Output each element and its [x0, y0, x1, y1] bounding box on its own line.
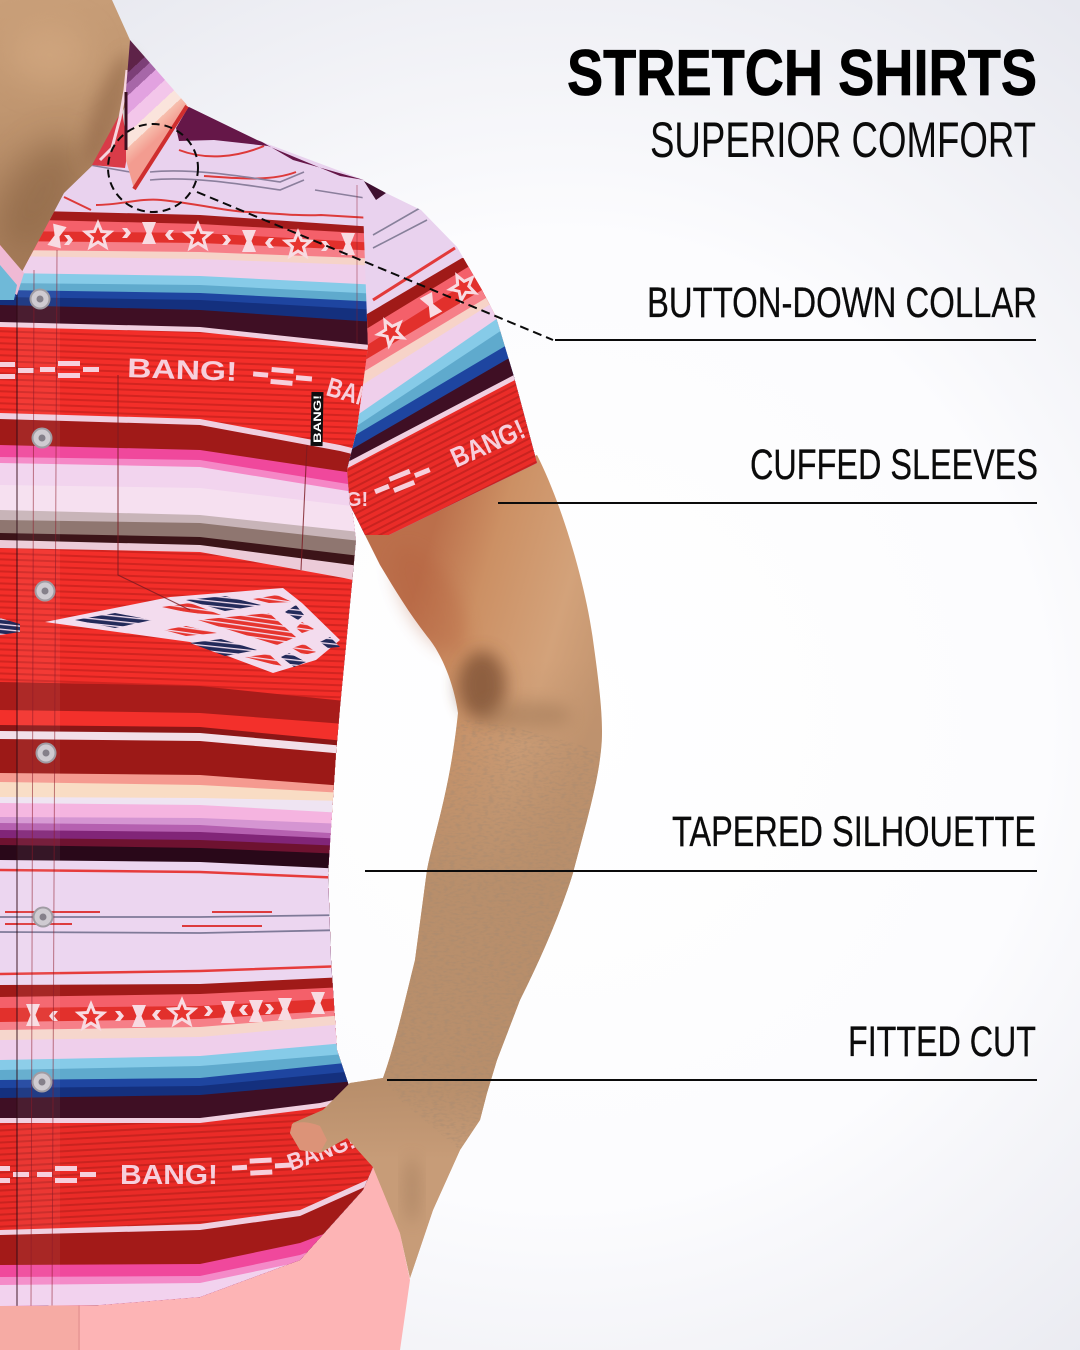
sleeve star print	[374, 315, 407, 348]
neck and chest skin	[0, 0, 142, 275]
lower sunset stripes	[0, 773, 344, 1072]
brand tag	[311, 392, 324, 446]
diamond motif	[0, 588, 340, 673]
sleeve: G!	[346, 489, 368, 511]
yoke dark shoulder fold	[176, 106, 364, 180]
red band with dark stripes	[0, 548, 371, 1301]
sleeve cuff print	[374, 467, 431, 494]
sleeve: BANG!	[446, 413, 530, 473]
thumb	[290, 1122, 327, 1153]
elbow crease shadow	[458, 651, 506, 719]
placket and seams	[17, 185, 357, 1310]
BANG! print lower: BANG!	[284, 1127, 359, 1177]
upper stripes	[0, 211, 371, 1306]
BANG! print upper	[0, 358, 362, 405]
pink shorts	[0, 1160, 410, 1350]
brand tag: BANG!	[312, 395, 324, 443]
BANG! print lower: BANG!	[120, 1159, 218, 1190]
BANG! print upper: BANG!	[127, 353, 238, 387]
left lapel	[0, 245, 24, 300]
collar leader dashed line	[197, 192, 553, 340]
BANG! print lower	[0, 1140, 355, 1184]
pocket seams	[118, 375, 307, 610]
stars and bow ties lower	[26, 992, 325, 1028]
yoke stripe lines	[64, 146, 371, 218]
buttons	[30, 288, 56, 1092]
sleeve	[347, 180, 537, 535]
hem stripes	[0, 1106, 373, 1306]
second star band and blue stripes	[0, 978, 373, 1306]
shirt body	[0, 107, 373, 1306]
BANG! print upper: BANG!	[323, 372, 399, 420]
stars and bow ties upper	[47, 222, 355, 256]
forearm hair texture	[386, 720, 598, 1148]
collar	[92, 40, 187, 189]
collar callout circle	[108, 124, 198, 212]
arm and hand	[290, 455, 610, 1278]
